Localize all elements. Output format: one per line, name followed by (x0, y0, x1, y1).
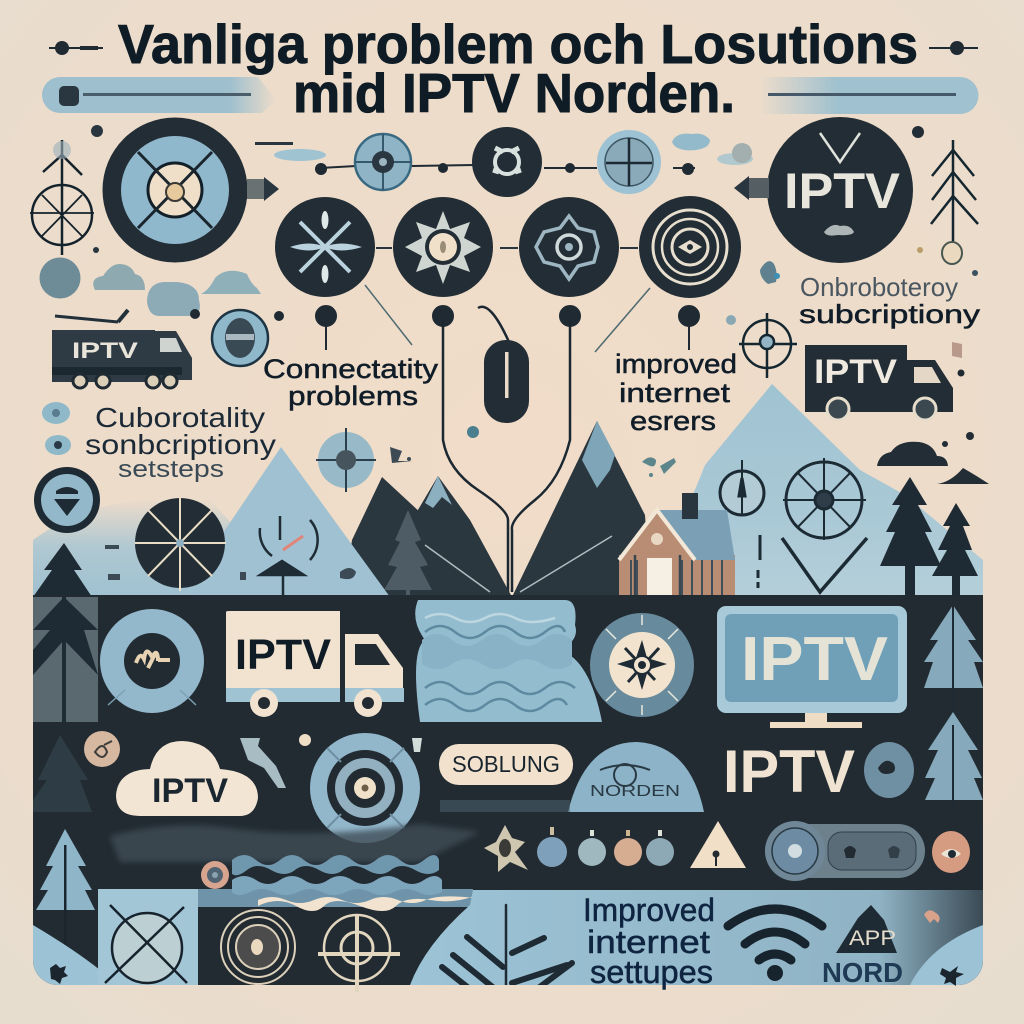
text: Improved internet setupes: Improved (583, 892, 715, 928)
icon: blue monitor (717, 606, 907, 728)
icon: cream truck (226, 611, 404, 717)
icon: blue target left (212, 310, 268, 366)
divider band 3 haze (110, 824, 480, 862)
text: IPTV cream: IPTV (723, 738, 855, 805)
icon: wifi (728, 909, 822, 980)
text: Cuborotality: setsteps (118, 456, 224, 483)
icon: peach fan (84, 731, 120, 767)
icon: right pine (931, 140, 978, 264)
icon: cabin (619, 493, 735, 596)
panel: waves band 3 (198, 855, 474, 911)
icon: small blue wheel (316, 428, 376, 492)
icons: balloons (537, 827, 674, 867)
marks center left (105, 426, 479, 580)
blue haze left (33, 498, 300, 597)
icon: cream triangle (690, 821, 746, 868)
icon: crosshair (318, 915, 400, 992)
text: Cuborotality: sonbcriptiony (85, 429, 276, 460)
icon: dark truck right (805, 345, 953, 420)
text: NORD: NORD (822, 957, 903, 988)
icon: peach eye (932, 831, 970, 873)
mountain: right blue (640, 384, 983, 597)
band 2 dark tree (33, 735, 92, 812)
icon: IPTV circle badge: IPTV (784, 163, 901, 219)
icon: wheel right (783, 458, 866, 540)
bottom corner: right curve (910, 925, 983, 985)
tree: left dark (33, 543, 92, 597)
title: Vanliga problem och Losutions (118, 13, 918, 75)
bottom band: blue right (410, 890, 983, 985)
text: Cuborotality (85, 402, 276, 483)
icon: blue monitor: IPTV (741, 625, 888, 694)
text: Onbrobty subscription: Onbroboteroy (800, 272, 958, 302)
text: Improved internet setupes: internet (587, 924, 710, 960)
pill: SOBLUNG (439, 744, 573, 785)
text: Improved internet esrers: internet (619, 378, 731, 408)
thin slanted lines (365, 285, 650, 352)
bottom band: left corner (33, 925, 125, 985)
clouds left (40, 258, 261, 319)
icon: APP mountain (836, 905, 897, 953)
text: Onbrobty subscription (799, 272, 980, 329)
dome: NORDEN: NORDEN (590, 783, 680, 800)
icon: crosshair right (739, 313, 797, 378)
icon: sun gear (590, 613, 694, 717)
bottom decoration left (50, 964, 68, 984)
mountains: dark center (345, 421, 650, 597)
tree: light band 3 (36, 829, 95, 945)
icon: fern (442, 905, 572, 998)
icon: small eye and dots right (726, 247, 978, 376)
title (118, 13, 918, 124)
tree: right light lower (925, 712, 983, 813)
connector segments row 2 (376, 247, 638, 249)
icon: central mouse and cables (443, 307, 570, 592)
icon: dark truck left (52, 310, 192, 388)
icon: gauge (260, 516, 318, 597)
mountain: large blue (190, 447, 390, 597)
text: Connectatity problems: Connectatity (263, 354, 439, 384)
icon: blue cross circle (597, 130, 661, 194)
subtitle pill right (760, 77, 978, 114)
marks green (642, 457, 676, 477)
title ornament right (929, 41, 978, 55)
icon: eyes left (42, 402, 71, 455)
icon: IPTV cloud (116, 741, 258, 816)
icon: concentric circles (639, 196, 741, 298)
icon: peach mark (924, 910, 940, 923)
icon: IPTV circle badge (767, 117, 913, 263)
icon: crossed circle panel (98, 889, 198, 985)
icon: left pine and wheel (30, 140, 94, 255)
text: Cuborotality: Cuborotality (95, 402, 265, 433)
text: Onbrobty subscription: subcriptiony (799, 299, 980, 329)
icon: blue outline star (519, 197, 619, 297)
dots and pins row (275, 306, 699, 350)
icon: badge circle left (34, 467, 100, 533)
arrow right (247, 177, 279, 201)
icon: slate badge (864, 742, 914, 798)
pill: SOBLUNG: SOBLUNG (452, 751, 560, 777)
icon: large target circle (102, 118, 248, 262)
band 1 tree left (33, 597, 98, 722)
panel: water waves (415, 600, 602, 722)
tree: right light upper (924, 605, 983, 720)
text: Improved internet esrers: improved (615, 349, 737, 379)
icon: star eye (484, 825, 528, 872)
title ornament left (49, 41, 103, 55)
text: Connectatity problems (263, 354, 439, 411)
icon: target right (720, 460, 764, 515)
text: Connectatity problems: problems (288, 381, 418, 411)
marks band 2 (240, 734, 422, 788)
icon: star spokes (275, 197, 375, 297)
icon: dark truck right: IPTV (814, 353, 897, 391)
decorative blobs top (91, 125, 924, 253)
icon: dark gear circle top (472, 127, 542, 197)
icon: cream truck: IPTV (235, 631, 331, 679)
dark clouds right (877, 432, 989, 484)
panel: lower dark bands (33, 595, 983, 998)
text: Improved internet esrers (615, 349, 737, 436)
icon: APP mountain: APP (849, 927, 896, 950)
connector top row (316, 164, 695, 174)
icon: blue target band 2 (310, 733, 420, 843)
icon: blue ring (100, 609, 204, 713)
icon: IPTV cloud: IPTV (152, 772, 228, 810)
icon: small blue compass (355, 134, 411, 190)
trees right (880, 477, 978, 596)
icon: dark wheel (135, 495, 226, 591)
arrow left (734, 176, 769, 200)
text: Improved internet esrers: esrers (630, 406, 716, 436)
icon: sun eye (393, 197, 493, 297)
title: mid IPTV Norden. (293, 62, 735, 124)
dome: NORDEN (440, 742, 704, 812)
icon: V lines and marks (758, 535, 867, 592)
icon: spiral (221, 910, 295, 984)
subtitle pill left (42, 77, 276, 113)
icon: peach ring (201, 861, 229, 889)
row of dark circle icons (275, 196, 741, 298)
text: Improved internet setupes: settupes (590, 954, 713, 990)
icon: dark truck left: IPTV (72, 338, 138, 363)
icon: toggle control (765, 821, 925, 881)
icon: leaf right (940, 966, 964, 986)
text: Improved internet setupes (583, 892, 715, 990)
